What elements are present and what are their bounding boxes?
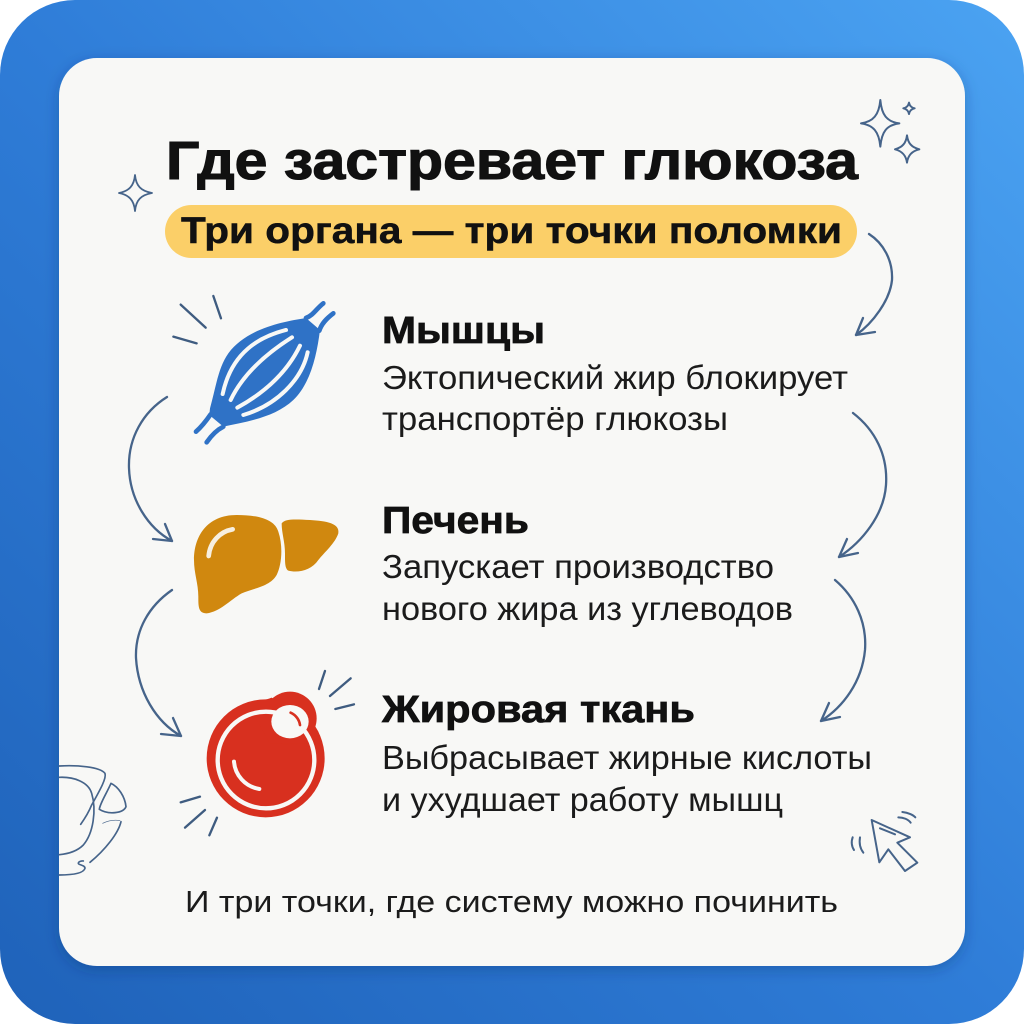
heading: fat tissue: Жировая ткань: [381, 689, 695, 731]
arrow: left, liver to fat: [136, 590, 181, 736]
title: Где застревает глюкоза: [166, 131, 859, 191]
heading: liver: Печень: [382, 500, 529, 542]
icon: liver: [194, 515, 338, 613]
text: muscles description: транспортёр глюкозы: [382, 400, 728, 437]
text: liver description: нового жира из углеводов: [382, 590, 793, 627]
text: muscles description: Эктопический жир блокирует: [382, 359, 848, 396]
arrow: right, muscles to liver: [839, 413, 886, 557]
text: fat tissue description: и ухудшает работу мышц: [382, 781, 783, 818]
icon: cursor: [852, 812, 917, 871]
subtitle pill: [165, 205, 857, 258]
icon: muscle: [173, 296, 333, 442]
text: fat tissue description: Выбрасывает жирные кислоты: [382, 739, 872, 776]
heading: muscles: Мышцы: [382, 310, 545, 352]
arrow: right, liver to fat: [821, 580, 865, 721]
icon: sparkle left: [119, 175, 152, 211]
text: muscles description: [382, 359, 848, 437]
white card: [59, 58, 965, 966]
arrow: left, muscles to liver: [129, 397, 172, 541]
icon: cup sketch: [59, 766, 126, 875]
text: fat tissue description: [382, 739, 872, 818]
icon: sparkles top right: [861, 100, 919, 163]
text: liver description: Запускает производство: [382, 548, 774, 585]
footer text: И три точки, где систему можно починить: [185, 884, 838, 919]
icon: fat cell: [181, 671, 354, 835]
subtitle pill: Три органа — три точки поломки: [181, 210, 842, 251]
text: liver description: [382, 548, 793, 627]
arrow: subtitle to muscles: [856, 234, 892, 335]
